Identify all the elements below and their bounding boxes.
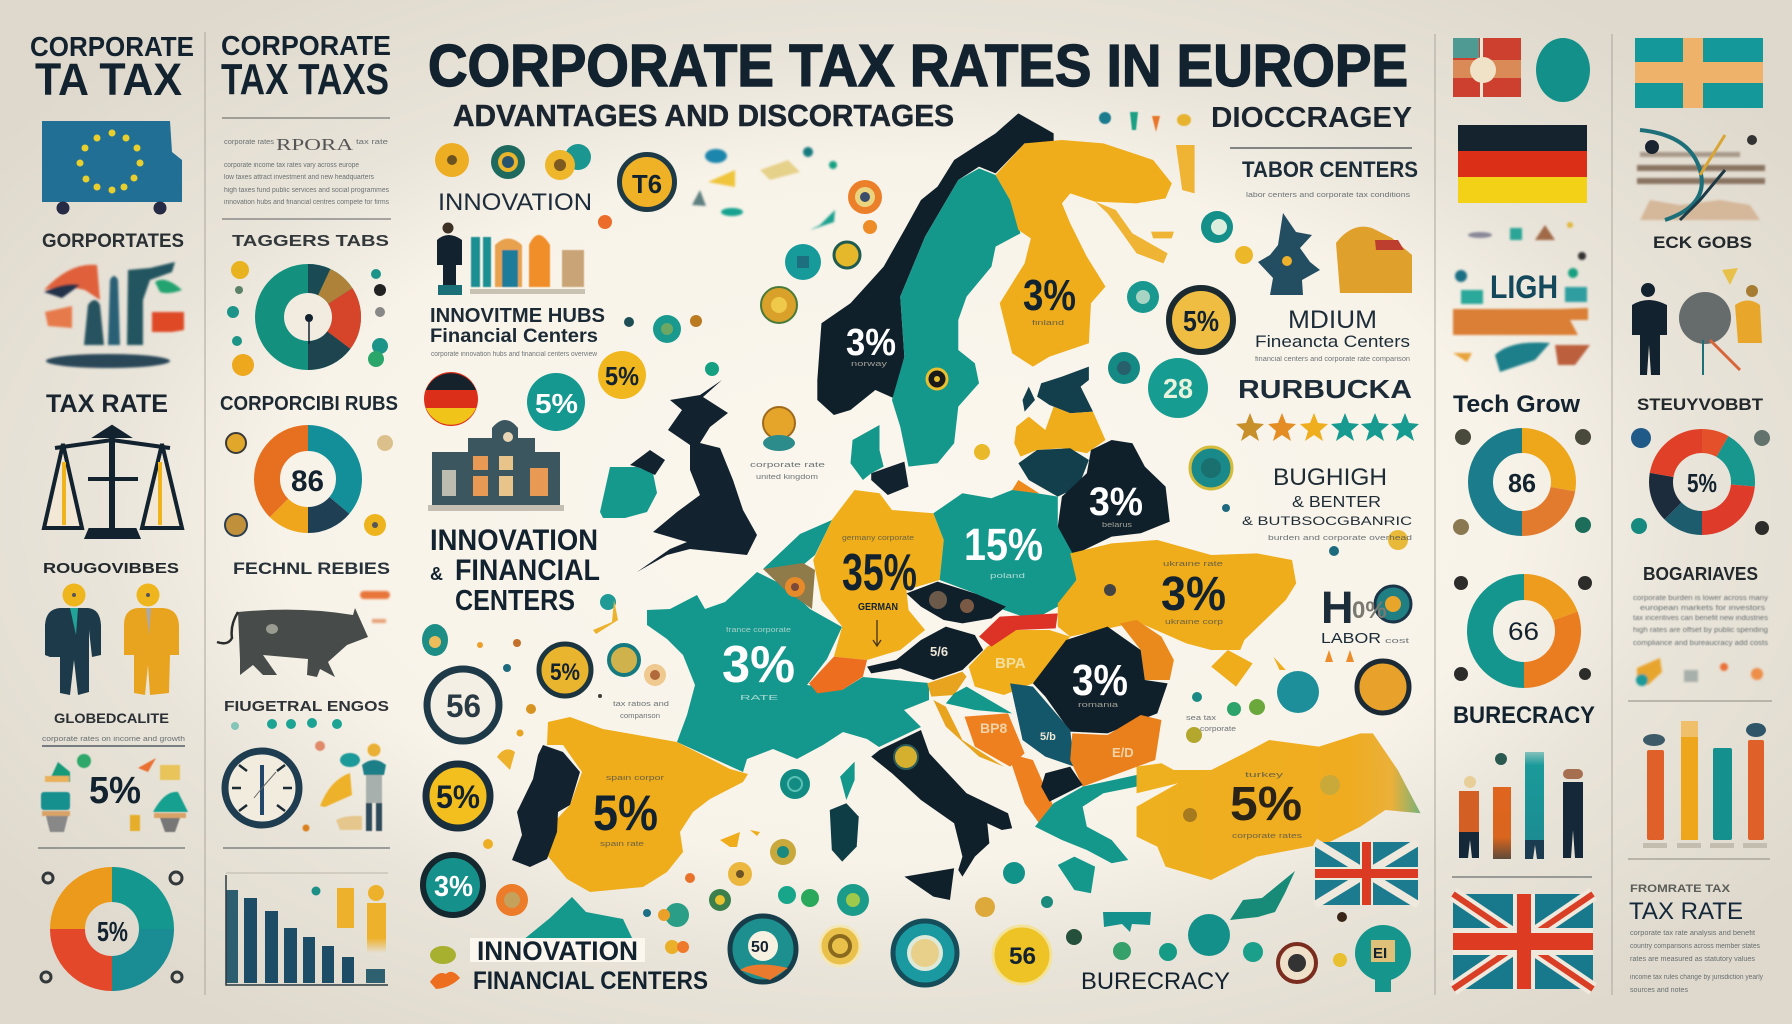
icons: rating stars: [1236, 413, 1419, 441]
heading: diocracy top right: DIOCCRAGEY: [1211, 102, 1412, 134]
panel: middle left icons: [422, 143, 1263, 995]
text block: innovation hubs and financial centres compete for firms: [224, 199, 389, 206]
text: ligh: LIGH: [1490, 269, 1558, 305]
label: turkey 5 percent: 5%: [1230, 778, 1302, 831]
icon: orange dot: [598, 215, 612, 229]
icon: industry illustration: [44, 262, 184, 368]
badge: 5 percent ring: [426, 764, 490, 828]
text: labor centers: labor centers and corporate tax conditions: [1246, 192, 1411, 199]
region: danish islands: [871, 462, 909, 495]
chart: pie 5 percent: [41, 872, 182, 982]
label: spain 5 percent: 5%: [593, 785, 658, 841]
text: medium financial centers: financial centers and corporate rate comparison: [1255, 356, 1410, 363]
region: macedonia: [1041, 767, 1083, 802]
heading: corporate tax taxes: [221, 30, 391, 104]
flag: red flag with emblem: [1453, 38, 1521, 97]
region: greece: [1035, 775, 1137, 893]
badge: 5 percent teal: [527, 373, 585, 431]
icons: donut 66 markers: [1454, 576, 1592, 681]
icons: bottom row coins: 50: [751, 939, 769, 956]
icon: dna stripes: [1637, 130, 1765, 220]
chart: donut 5 percent right: 5%: [1687, 468, 1717, 498]
panel: right column two: [1628, 38, 1772, 994]
label: spain 5 percent: spain corpor: [606, 775, 665, 782]
text block: tax rate notes: corporate tax rate analysis and benefit: [1630, 930, 1755, 937]
icons: black sea coins: [1186, 661, 1409, 743]
region: poland: [933, 490, 1076, 620]
flag: sweden: [1635, 38, 1763, 108]
text block: blurred paragraph: [1633, 595, 1769, 647]
icons: left of bottom label: [430, 946, 460, 989]
chart: bars orange yellow teal: [1643, 721, 1767, 848]
region: lithuania: [1018, 448, 1089, 497]
region: germany: [813, 490, 944, 660]
label: innovation: INNOVATION: [438, 189, 592, 216]
text: uk note: [750, 462, 825, 481]
map: west and south drawn in absolute pixels: [512, 380, 929, 892]
label: TAX RATE: [46, 390, 168, 418]
icon: EU flag truck: [42, 121, 182, 214]
region: czechia: [906, 582, 1006, 623]
icons: small orange stars: [1325, 650, 1354, 662]
icon: T6 badge: T6: [632, 169, 662, 199]
label: poland 15 percent: poland: [990, 573, 1025, 580]
label: turkey 5 percent: turkey: [1245, 772, 1284, 779]
text block: tax rate notes: TAX RATE: [1629, 898, 1743, 925]
flag: germany: [1458, 125, 1587, 203]
label: turkey 5 percent: corporate rates: [1232, 833, 1303, 840]
text: uk note: corporate rate: [750, 462, 825, 469]
labels: central europe small values: 5/6: [930, 644, 948, 659]
region: corsica: [840, 762, 855, 800]
text: medium financial centers: Fineancta Centers: [1255, 332, 1410, 351]
text: hub labor: cost: [1385, 638, 1409, 645]
label: ROUGOVIBBES: [43, 560, 179, 577]
icon: person and towers: [437, 222, 585, 295]
text: labor centers: [1242, 157, 1418, 199]
badge: 56 ring: [427, 669, 499, 741]
badge: 28: 28: [1163, 373, 1193, 404]
text block: tax rate notes: rates are measured as statutory values: [1630, 956, 1756, 963]
icon: T6 badge: [620, 154, 674, 210]
icons: donut markers: [1453, 429, 1591, 535]
label: study: STEUYVOBBT: [1637, 395, 1764, 414]
label: TAGGERS TABS: [232, 233, 389, 250]
text: bughigh benter: BUGHIGH: [1273, 464, 1387, 491]
labels: central europe small values: 5/b: [1040, 731, 1056, 743]
label: FECHNL REBIES: [233, 559, 390, 578]
icon: bull: [217, 591, 390, 677]
icons: bottom row coins: 56: [1009, 943, 1036, 970]
text: innovative hubs: INNOVITME HUBS: [430, 305, 605, 327]
chart: donut 66: [1480, 587, 1568, 675]
icons: black sea coins: sea tax: [1186, 715, 1217, 722]
text block: [224, 135, 389, 206]
text block: high taxes fund public services and social programmes: [224, 187, 389, 194]
text block: tax rate notes: [1629, 883, 1763, 994]
text: hub labor: [1321, 582, 1411, 647]
icon: orange coin: [496, 884, 528, 916]
chart: donut 5 percent right: [1661, 441, 1743, 523]
text block: low taxes attract investment and new headquarters: [224, 174, 374, 181]
text block: blurred paragraph: european markets for investors: [1640, 605, 1766, 612]
region: croatia: [933, 700, 1004, 767]
text block: RPORA: [276, 135, 354, 154]
region: russian coast: [1095, 145, 1195, 263]
text: medium financial centers: MDIUM: [1288, 306, 1377, 334]
icons: coins row: [435, 143, 591, 180]
icons: donut corner markers: [1631, 428, 1770, 535]
icons: bottom right coins: [1103, 871, 1347, 982]
label: romania 3 percent: 3%: [1072, 656, 1128, 705]
text: bughigh benter: [1242, 464, 1412, 542]
region: netherlands: [763, 520, 832, 569]
region: turkey: [1137, 733, 1421, 880]
text: medium financial centers: [1255, 306, 1410, 363]
chart: donut 66: 66: [1508, 618, 1539, 646]
label: GLOBEDCALITE: [54, 710, 169, 726]
badge: 56 ring: 56: [446, 688, 481, 724]
region: ireland: [600, 467, 657, 518]
text: uk note: united kingdom: [756, 474, 818, 481]
icons: coin markers: [225, 433, 393, 536]
icons: bottom row coins: [730, 916, 1051, 985]
region: albania: [1008, 753, 1054, 823]
label: germany 35 percent: 35%: [842, 544, 917, 602]
text: innovative hubs: Financial Centers: [430, 326, 598, 347]
region: romania: [1033, 627, 1168, 733]
label: burecracy: BURECRACY: [1453, 702, 1595, 729]
text block: blurred paragraph: compliance and bureaucracy add costs: [1633, 640, 1769, 647]
icon: teal stem badge: [1355, 925, 1411, 992]
badge: 28: [1148, 358, 1208, 418]
label: france 3 percent: RATE: [740, 695, 779, 702]
label: tech goes: ECK GOBS: [1653, 233, 1752, 252]
text: hub labor: H: [1321, 582, 1354, 633]
icons: coins near center top: [624, 180, 882, 451]
region: switzerland: [809, 657, 867, 693]
region: slovenia: [927, 672, 967, 697]
chart: donut 86: [267, 438, 349, 520]
label: poland 15 percent: 15%: [964, 519, 1043, 570]
text block: tax rate notes: sources and notes: [1630, 987, 1689, 994]
region: sardinia: [830, 803, 859, 862]
title: CORPORATE TAX RATES IN EUROPE: [428, 33, 1408, 99]
panel: center right: [1099, 112, 1419, 992]
labels: central europe small values: BPA: [995, 655, 1026, 672]
badge: 3 percent ring teal: [423, 855, 483, 915]
chart: donut 86: 86: [291, 465, 324, 498]
region: northern ireland: [630, 450, 665, 475]
icon: teal globe: [1536, 38, 1590, 102]
badge: 5 percent small ring: 5%: [550, 659, 580, 686]
icons: small scatter south: [643, 769, 1263, 962]
badge: 5 percent ring: 5%: [436, 779, 480, 815]
icons: coins near france: [598, 645, 669, 720]
labels: central europe small values: [930, 644, 1134, 760]
icons: teal and yellow coins: [1108, 211, 1408, 556]
region: norway: [817, 113, 1054, 415]
icon: yellow box: [1336, 227, 1412, 293]
heading: corporate tax taxes: TAX TAXS: [221, 55, 389, 104]
icon: teal mound: [523, 897, 633, 940]
badge: 5 percent yellow: [598, 351, 646, 399]
badge: 5 percent teal: 5%: [535, 388, 578, 419]
labels: central europe small values: E/D: [1112, 745, 1134, 760]
heading: corporate tax: TA TAX: [35, 54, 182, 105]
label: finland 3 percent: 3%: [1023, 271, 1076, 320]
label: belarus 3 percent: 3%: [1089, 480, 1143, 524]
text: hub labor: 0%: [1352, 597, 1387, 624]
icon: germany ball: [424, 372, 478, 426]
region: spain: [547, 717, 748, 892]
text block: tax rate notes: income tax rules change by jurisdiction yearly: [1630, 974, 1763, 981]
region: portugal: [512, 745, 580, 867]
subtitle: ADVANTAGES AND DISCORTAGES: [453, 98, 954, 133]
icons: small markers: [227, 261, 388, 376]
badge: 5 percent: 5%: [1183, 306, 1219, 338]
icon: scattered top center figures: [692, 147, 837, 230]
label: germany 35 percent: germany corporate: [842, 535, 914, 542]
region: serbia: [1010, 683, 1074, 767]
icons: coins near france: comparison: [620, 713, 660, 720]
heading: corporate tax: CORPORATE: [30, 31, 194, 62]
label: GORPORTATES: [42, 231, 184, 252]
label: germany 35 percent: [842, 535, 917, 646]
region: hungary: [969, 630, 1070, 695]
label: innovation bottom: INNOVATION: [477, 936, 638, 966]
icon: teal stem badge: EI: [1373, 945, 1387, 962]
chart: pie 5 percent: 5%: [97, 916, 128, 947]
region: austria: [867, 627, 983, 680]
chart: donut 86 right: [1480, 440, 1564, 524]
text: innovation and financial centers: INNOVATION: [430, 524, 598, 557]
icons: scattered left circles: [422, 594, 618, 849]
region: bulgaria: [1070, 715, 1161, 787]
map: north and east in zoom coords: [813, 113, 1195, 660]
region: adriatic teal: [946, 687, 1012, 713]
region: crimea: [1211, 650, 1286, 687]
label: norway 3 percent: norway: [851, 361, 888, 368]
text block: blurred paragraph: tax incentives can benefit new industries: [1633, 615, 1769, 622]
badge: 5 percent yellow: 5%: [605, 361, 639, 391]
icons: below paragraph: [1636, 658, 1763, 686]
label: FIUGETRAL ENGOS: [224, 698, 389, 715]
text block: corporate rates: [224, 139, 275, 146]
badge: 3 percent ring teal: 3%: [434, 871, 473, 903]
icons: small figures: [1468, 222, 1586, 260]
label: ukraine 3 percent: ukraine corp: [1165, 619, 1223, 626]
text block: tax rate: [356, 139, 388, 146]
region: ukraine: [1058, 540, 1296, 650]
region: latvia: [1014, 407, 1105, 457]
region: great britain: [637, 380, 757, 572]
badge: 5 percent small ring: [539, 644, 591, 696]
icon: light technology illustration: [1453, 268, 1590, 372]
labels: central europe small values: BP8: [980, 720, 1007, 736]
text: bughigh benter: & BENTER: [1292, 494, 1381, 511]
panel: left column one: [30, 31, 194, 982]
chart: people bars: [1459, 752, 1583, 859]
flag: united kingdom center: [1315, 842, 1418, 905]
region: slovakia: [979, 613, 1058, 647]
label: belarus 3 percent: belarus: [1102, 522, 1133, 529]
icons: near heading: [1099, 112, 1191, 132]
region: belarus: [1058, 440, 1170, 557]
text: innovation and financial centers: CENTERS: [455, 585, 575, 617]
label: financial centers bottom: FINANCIAL CENTERS: [473, 967, 708, 995]
label: germany 35 percent: GERMAN: [858, 602, 898, 613]
chart: map of europe: [512, 113, 1421, 900]
flag: united kingdom large: [1453, 894, 1593, 989]
icon: balance scales: [44, 427, 182, 537]
heading: corporate tax: [30, 31, 194, 105]
label: romania 3 percent: romania: [1078, 702, 1118, 709]
text block: corporate rates on income and growth: [42, 736, 185, 743]
icon: person and objects: [302, 741, 386, 832]
icons: black sea coins: corporate: [1200, 726, 1236, 733]
panel: left column two: [217, 30, 398, 985]
stat: 5 percent: 5%: [89, 770, 141, 812]
column dividers: [205, 32, 1612, 995]
region: sweden: [892, 168, 1020, 467]
text block: blurred paragraph: corporate burden is lower across many: [1633, 595, 1769, 602]
label: ukraine 3 percent: ukraine rate: [1163, 561, 1223, 568]
icon: building: [428, 420, 564, 511]
text: innovation and financial centers: &: [430, 564, 443, 584]
icons: teal dots: [231, 718, 342, 730]
region: italy: [871, 730, 1012, 900]
icon: person and dial: [1632, 268, 1762, 375]
text: innovation and financial centers: FINANCIAL: [455, 554, 600, 587]
text block: blurred paragraph: high rates are offset by public spending: [1633, 627, 1768, 634]
label: tech grow: Tech Grow: [1453, 391, 1580, 418]
label: france 3 percent: 3%: [722, 636, 795, 694]
text: labor centers: TABOR CENTERS: [1242, 157, 1418, 182]
region: kaliningrad: [1010, 480, 1039, 493]
region: belgium: [763, 563, 815, 609]
region: bosnia: [964, 713, 1025, 767]
icon: dark machinery: [1258, 213, 1320, 295]
icon: clock: [225, 751, 299, 825]
heading: corporate tax taxes: CORPORATE: [221, 30, 391, 61]
region: france and alps: [647, 572, 929, 772]
text: bughigh benter: burden and corporate overhead: [1268, 535, 1412, 542]
label: advantages: BOGARIAVES: [1643, 564, 1758, 584]
label: france 3 percent: france corporate: [726, 627, 791, 634]
region: moldova: [1120, 620, 1174, 680]
map: central and south east in zoom coords: [809, 540, 1421, 900]
label: CORPORCIBI RUBS: [220, 393, 398, 415]
chart: donut 86 right: 86: [1508, 468, 1536, 498]
text: bughigh benter: & BUTBSOCGBANRIC: [1242, 514, 1412, 528]
text: innovative hubs: corporate innovation hubs and financial centers overview: [431, 351, 598, 358]
region: denmark: [850, 425, 884, 480]
panel: right column one: [1452, 38, 1595, 989]
text: burecracy: BURECRACY: [1081, 968, 1230, 995]
text: hub labor: LABOR: [1321, 630, 1381, 647]
region: finland and kola: [996, 140, 1172, 367]
icon: two business people: [45, 584, 179, 695]
label: norway 3 percent: 3%: [846, 322, 896, 364]
text: innovative hubs: [430, 305, 605, 358]
label: ukraine 3 percent: 3%: [1161, 568, 1226, 621]
map coins: [894, 369, 1340, 822]
text block: tax rate notes: country comparisons across member states: [1630, 943, 1760, 950]
chart: bar chart descending: [226, 873, 388, 985]
chart: donut tax share: [255, 264, 361, 370]
icons: coins near france: tax ratios and: [613, 701, 669, 708]
text: innovation and financial centers: [430, 524, 600, 617]
text block: corporate income tax rates vary across europe: [224, 162, 359, 169]
region: estonia: [1023, 367, 1093, 413]
icons: around stat: [41, 754, 188, 832]
label: spain 5 percent: spain rate: [600, 841, 644, 848]
heading: rurbucka: RURBUCKA: [1238, 374, 1412, 404]
label: finland 3 percent: finland: [1032, 320, 1064, 327]
badge: 5 percent: [1169, 288, 1233, 352]
region: balearic islands: [720, 830, 760, 847]
text block: tax rate notes: FROMRATE TAX: [1630, 883, 1731, 895]
